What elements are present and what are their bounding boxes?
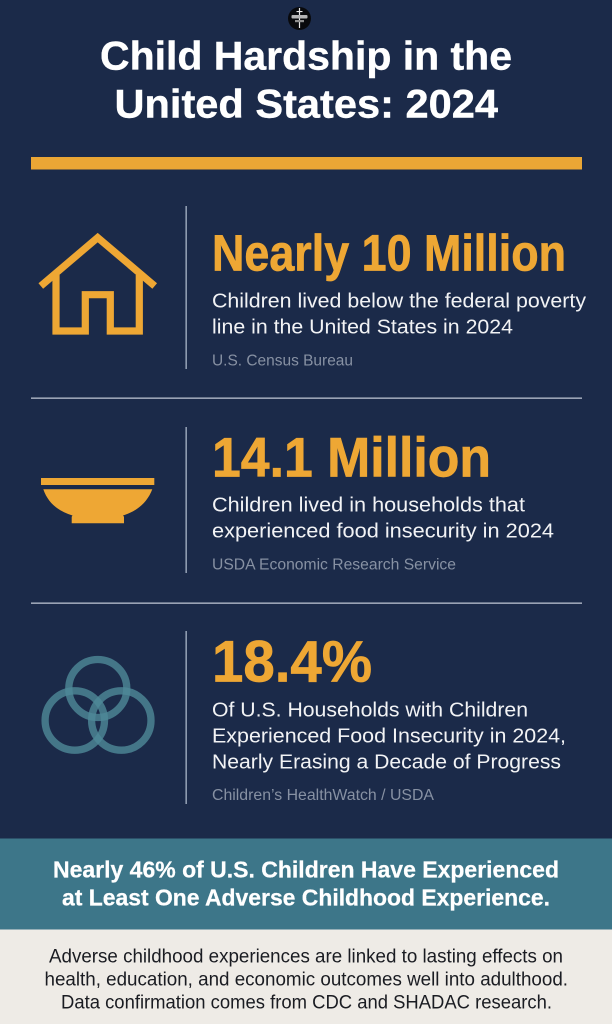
footer note: Adverse childhood experiences are linked to lasting effects on (49, 947, 563, 968)
description: Children lived in households that (212, 494, 525, 516)
title: United States: 2024 (114, 82, 499, 126)
description: experienced food insecurity in 2024 (212, 520, 554, 542)
footer note (0, 930, 612, 1024)
vertical divider (186, 427, 187, 573)
statistic: 18.4%: 18.4% (212, 630, 372, 694)
footer note: Data confirmation comes from CDC and SHADAC research. (61, 992, 552, 1014)
icon: logo badge (288, 7, 311, 30)
vertical divider (186, 206, 187, 369)
description: Children lived below the federal poverty (212, 290, 587, 312)
panel: household share (45, 630, 566, 804)
statistic: nearly 10 million: Nearly 10 Million (212, 224, 566, 282)
description (212, 290, 587, 338)
title: Child Hardship in the (100, 34, 512, 78)
gold title rule (31, 157, 582, 170)
source: Children’s HealthWatch / USDA (212, 787, 435, 804)
panel: food insecurity (41, 426, 554, 574)
statistic: 14.1 million: 14.1 Million (212, 426, 491, 488)
callout banner (0, 838, 612, 930)
description: Experienced Food Insecurity in 2024, (212, 724, 566, 748)
source: U.S. Census Bureau (212, 352, 353, 370)
description (212, 494, 554, 542)
description: Nearly Erasing a Decade of Progress (212, 750, 561, 774)
callout banner: Nearly 46% of U.S. Children Have Experienced (53, 856, 559, 882)
divider (31, 398, 582, 399)
footer note: health, education, and economic outcomes well into adulthood. (44, 970, 568, 991)
source: USDA Economic Research Service (212, 556, 456, 574)
description: Of U.S. Households with Children (212, 698, 528, 722)
callout banner: at Least One Adverse Childhood Experience. (62, 884, 550, 910)
divider (31, 602, 582, 604)
icon: house (41, 238, 155, 331)
description (212, 698, 566, 774)
title (100, 34, 512, 126)
vertical divider (186, 631, 187, 804)
panel: poverty (41, 206, 587, 370)
icon: three overlapping circles (45, 660, 151, 750)
icon: bowl (41, 478, 154, 523)
description: line in the United States in 2024 (212, 316, 513, 338)
